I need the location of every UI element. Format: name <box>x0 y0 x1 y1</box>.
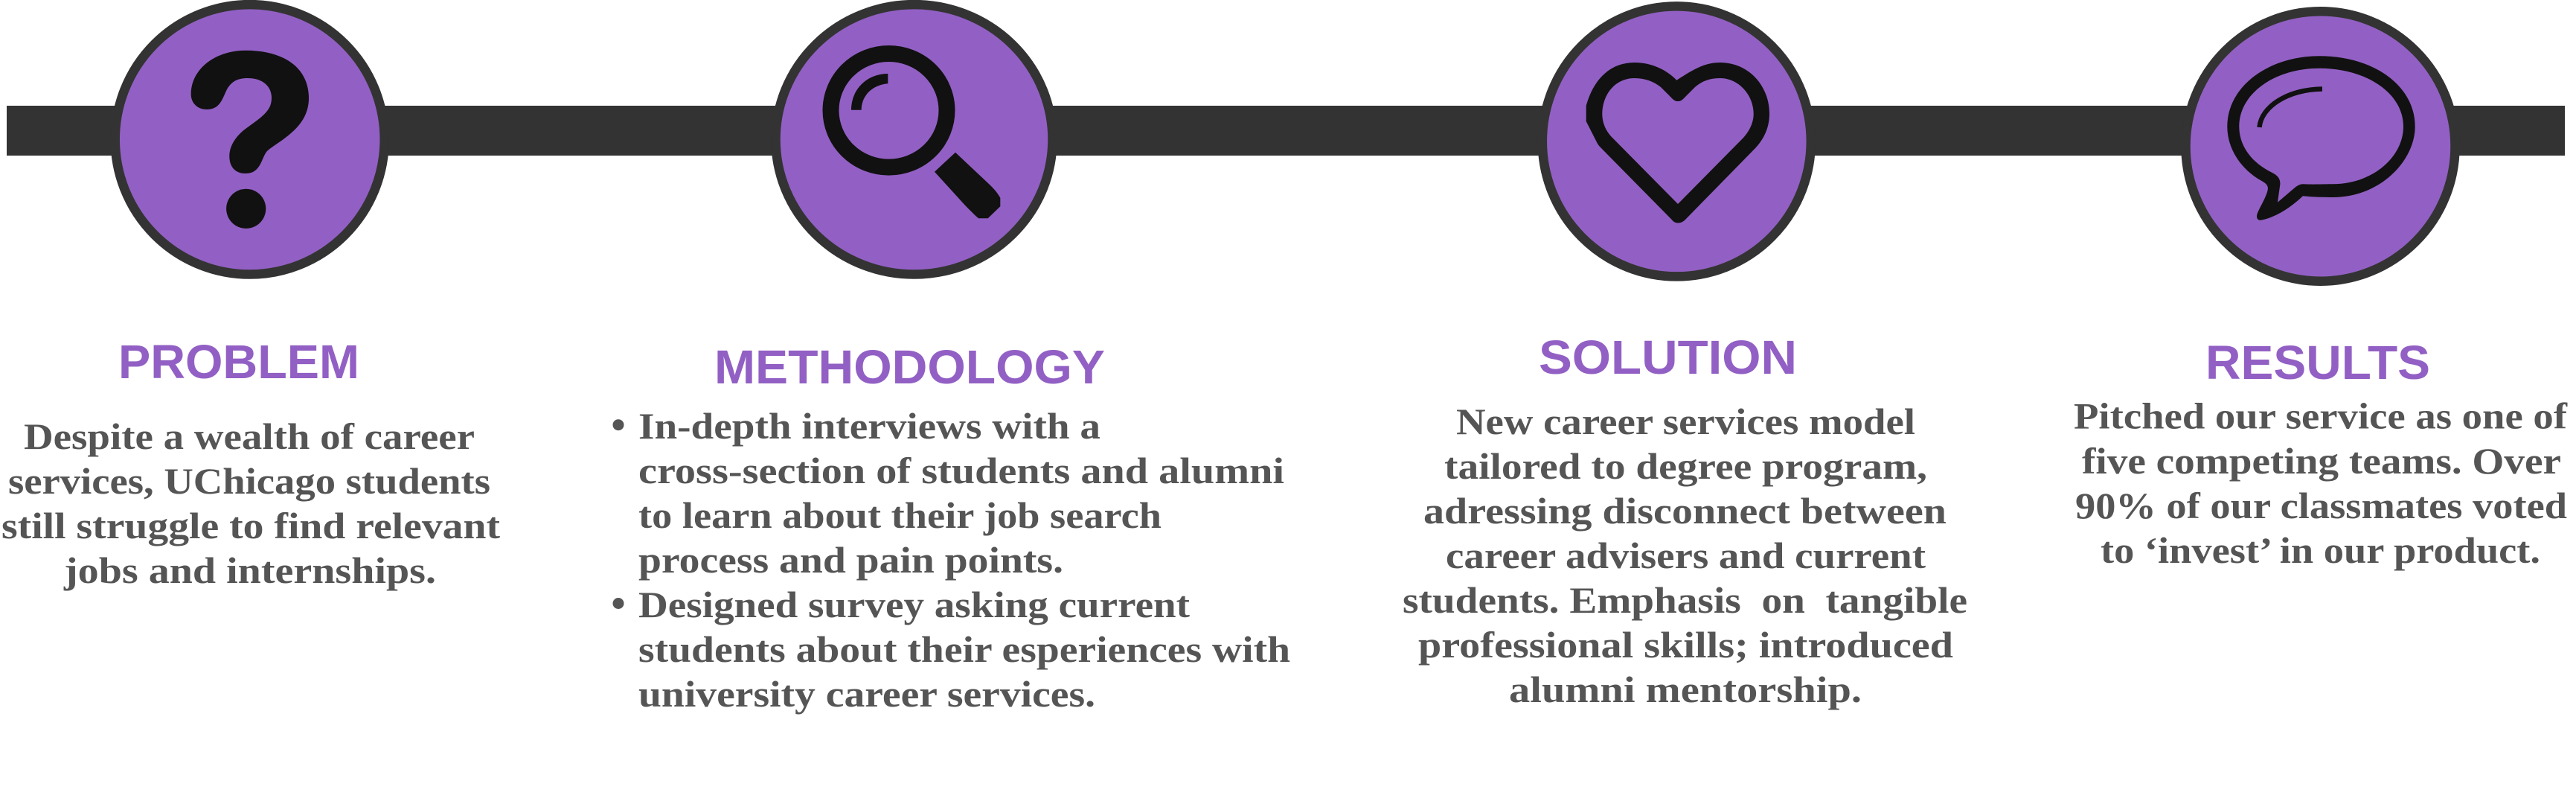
text block: methodology bullets: to learn about their job search <box>638 494 1162 536</box>
panel: methodology <box>613 4 1290 715</box>
bullet 1 <box>613 419 624 430</box>
panel: results <box>2074 11 2568 571</box>
text block: results description: Pitched our service as one of <box>2074 395 2568 436</box>
text block: problem description: still struggle to find relevant <box>1 505 500 546</box>
heading: problem: PROBLEM <box>118 335 359 389</box>
text block: problem description <box>1 415 500 591</box>
text block: methodology bullets: cross-section of students and alumni <box>638 450 1284 491</box>
icon: question mark in circle <box>115 4 385 274</box>
text block: solution description: students. Emphasis on tangible <box>1403 579 1967 621</box>
text block: solution description: New career services model <box>1456 401 1915 442</box>
text block: results description: five competing teams. Over <box>2082 440 2561 482</box>
icon: speech bubble in circle <box>2186 11 2455 281</box>
text block: solution description <box>1403 401 1967 710</box>
text block: problem description: jobs and internships. <box>63 549 436 591</box>
text block: results description: 90% of our classmates voted <box>2075 485 2567 526</box>
text block: methodology bullets: In-depth interviews with a <box>638 405 1100 447</box>
heading: solution: SOLUTION <box>1539 331 1797 384</box>
panel: solution <box>1403 6 1967 710</box>
icon: magnifying glass in circle <box>775 4 1052 274</box>
text block: solution description: tailored to degree program, <box>1444 445 1927 487</box>
text block: methodology bullets: university career services. <box>638 673 1095 715</box>
heading: methodology: METHODOLOGY <box>714 340 1105 394</box>
text block: solution description: adressing disconnect between <box>1423 490 1947 532</box>
icon: heart in circle <box>1542 6 1811 276</box>
panel: problem <box>1 4 500 591</box>
text block: methodology bullets: process and pain points. <box>638 539 1063 581</box>
text block: results description: to ‘invest’ in our product. <box>2101 529 2540 571</box>
timeline bar <box>7 106 2565 156</box>
text block: problem description: services, UChicago students <box>8 460 490 502</box>
heading: results: RESULTS <box>2205 336 2430 389</box>
text block: solution description: professional skills; introduced <box>1418 624 1953 666</box>
text block: methodology bullets: Designed survey asking current <box>638 584 1190 625</box>
text block: problem description: Despite a wealth of career <box>24 415 475 457</box>
bullet 2 <box>613 598 624 609</box>
text block: solution description: alumni mentorship. <box>1509 669 1862 710</box>
text block: methodology bullets: students about their esperiences with <box>638 628 1290 670</box>
text block: results description <box>2074 395 2568 571</box>
text block: solution description: career advisers and current <box>1446 535 1926 576</box>
text block: methodology bullets <box>613 405 1290 715</box>
